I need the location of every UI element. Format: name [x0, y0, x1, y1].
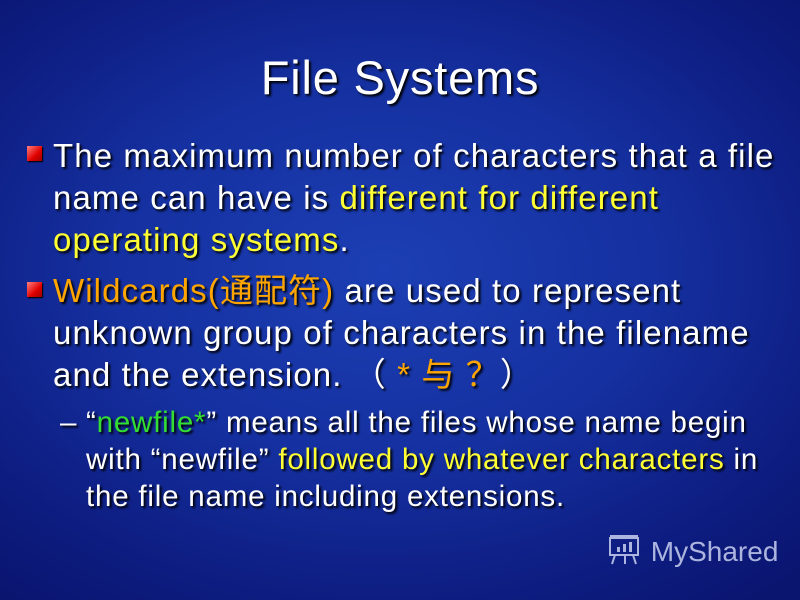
text: bullet 1: name can have is different for different: [53, 179, 659, 216]
text: sub bullet: the file name including extensions.: [86, 480, 565, 513]
text: bullet 1: The maximum number of characters that a file: [53, 137, 774, 174]
text: bullet 2: and the extension. （ * 与 ？）: [53, 356, 534, 393]
icon: bullet 2: [27, 282, 42, 297]
text: bullet 2: Wildcards(通配符) are used to represent: [53, 272, 681, 309]
text: bullet 1: [53, 137, 776, 262]
text: sub bullet: [60, 406, 759, 516]
text: bullet 2: unknown group of characters in the filename: [53, 314, 750, 351]
text: sub bullet: with “newfile” followed by whatever characters in: [86, 443, 758, 476]
text: sub bullet: “newfile*” means all the files whose name begin: [86, 406, 747, 439]
text: sub bullet: –: [60, 406, 77, 439]
title: File Systems: [261, 51, 539, 104]
watermark: MyShared: MyShared: [651, 536, 778, 567]
text: bullet 1: operating systems.: [53, 221, 350, 258]
text: bullet 2: [53, 272, 750, 393]
icon: bullet 1: [27, 146, 42, 161]
